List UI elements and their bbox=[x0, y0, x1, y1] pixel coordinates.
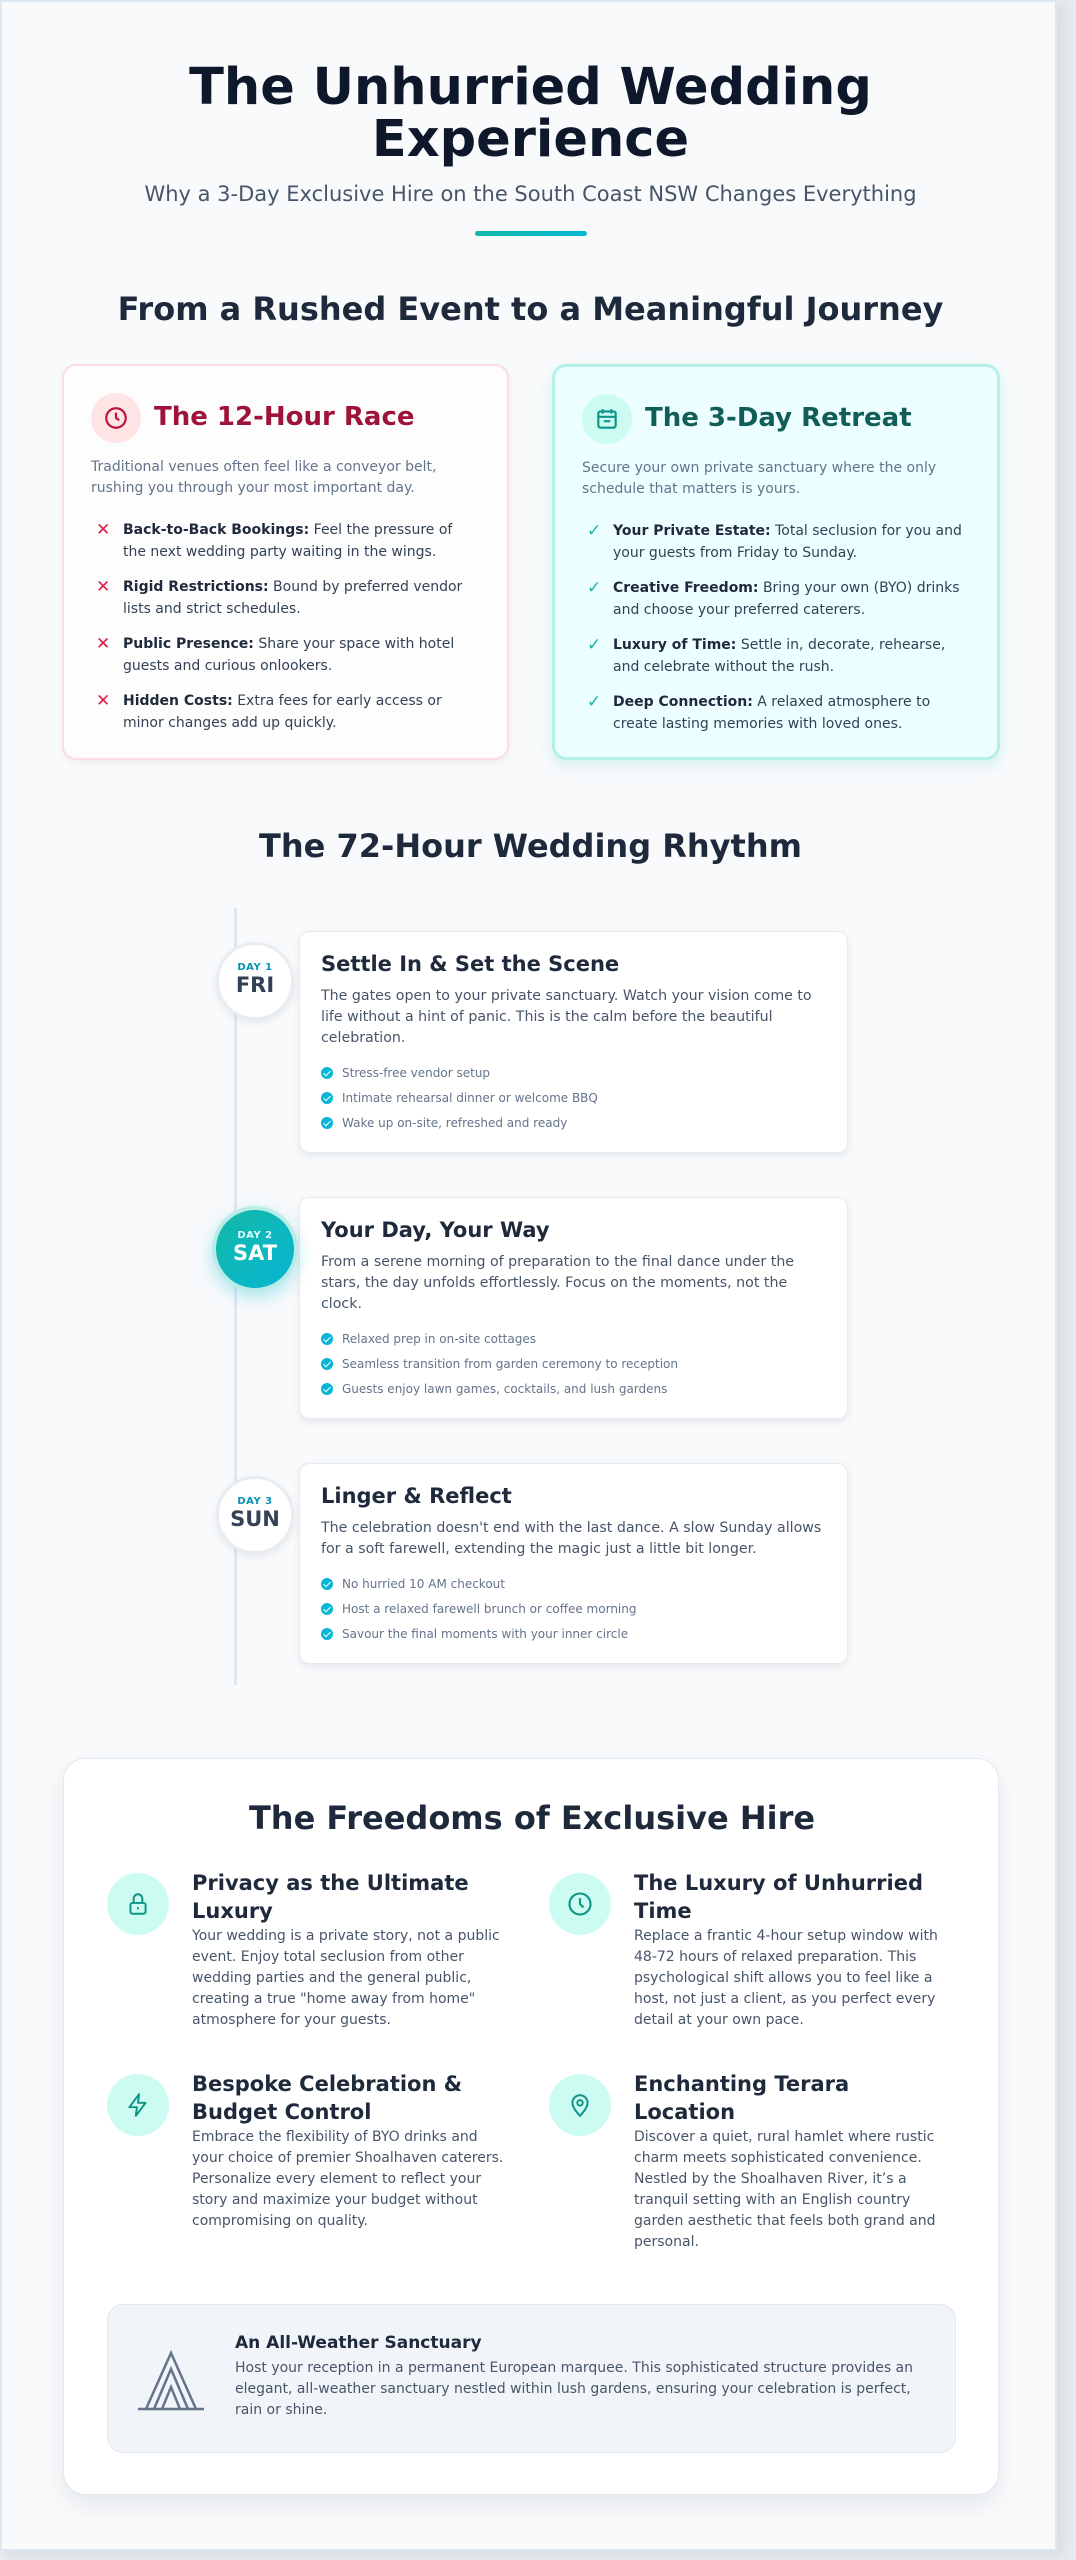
timeline card: day 2: Your Day, Your Way bbox=[321, 1218, 550, 1242]
timeline card: day 1 bbox=[299, 931, 848, 1153]
icon: clock bbox=[91, 393, 141, 443]
timeline card: day 2: Guests enjoy lawn games, cocktails, and lush gardens bbox=[342, 1382, 667, 1396]
list: benefits: ✓ bbox=[587, 635, 601, 655]
feature: privacy: Privacy as the Ultimate Luxury bbox=[192, 1871, 469, 1923]
timeline card: day 2: Seamless transition from garden ceremony to reception bbox=[342, 1357, 678, 1371]
timeline card: day 3 bbox=[299, 1463, 848, 1664]
timeline card: day 1: Stress-free vendor setup bbox=[342, 1066, 490, 1080]
subtitle: Why a 3-Day Exclusive Hire on the South Coast NSW Changes Everything bbox=[144, 182, 917, 206]
timeline line bbox=[234, 908, 237, 1685]
feature: time bbox=[549, 1871, 938, 2028]
timeline card: day 2: From a serene morning of preparation to the final dance under the stars, the day unfolds effortlessly. Focus on the moments, not the clock. bbox=[321, 1254, 794, 1312]
feature: budget: Bespoke Celebration & Budget Control bbox=[192, 2072, 462, 2124]
badge: day 1: DAY 1 bbox=[237, 962, 273, 973]
accent bar bbox=[475, 231, 587, 236]
panel: 3-day retreat bbox=[552, 364, 1000, 760]
timeline card: day 1: Settle In & Set the Scene bbox=[321, 952, 619, 976]
heading: The Freedoms of Exclusive Hire bbox=[249, 1799, 815, 1837]
list: drawbacks: ✕ bbox=[96, 691, 110, 711]
callout: all-weather sanctuary bbox=[107, 2304, 956, 2453]
panel: 12-hour race bbox=[62, 364, 509, 760]
feature: privacy bbox=[107, 1871, 500, 2028]
badge: day 3 bbox=[216, 1476, 294, 1554]
list: benefits: Luxury of Time: Settle in, decorate, rehearse, and celebrate without the rush. bbox=[613, 637, 945, 675]
feature: time: Replace a frantic 4-hour setup window with 48-72 hours of relaxed preparation. This psychological shift allows you to feel like a host, not just a client, as you perfect every detail at your own pace. bbox=[634, 1928, 938, 2028]
badge: day 2 bbox=[212, 1206, 298, 1292]
heading: The 12-Hour Race bbox=[154, 402, 415, 432]
panel: freedoms bbox=[63, 1758, 999, 2495]
list: drawbacks: ✕ bbox=[96, 634, 110, 654]
badge: day 1 bbox=[216, 942, 294, 1020]
list: drawbacks: Public Presence: Share your space with hotel guests and curious onlookers. bbox=[123, 636, 454, 674]
feature: time: The Luxury of Unhurried Time bbox=[634, 1871, 923, 1923]
list: drawbacks: Hidden Costs: Extra fees for early access or minor changes add up quickly. bbox=[123, 693, 442, 731]
badge: day 2: DAY 2 bbox=[237, 1230, 273, 1241]
timeline card: day 2: Relaxed prep in on-site cottages bbox=[342, 1332, 536, 1346]
feature: budget: Embrace the flexibility of BYO drinks and your choice of premier Shoalhaven caterers. Personalize every element to reflect your story and maximize your budget without compromising on quality. bbox=[192, 2129, 503, 2229]
list: benefits: Your Private Estate: Total seclusion for you and your guests from Friday to Sunday. bbox=[613, 523, 962, 561]
timeline card: day 3: No hurried 10 AM checkout bbox=[342, 1577, 505, 1591]
list: benefits: Deep Connection: A relaxed atmosphere to create lasting memories with loved ones. bbox=[613, 694, 930, 732]
timeline card: day 2 bbox=[299, 1197, 848, 1419]
list: benefits bbox=[587, 521, 962, 732]
intro: Secure your own private sanctuary where the only schedule that matters is yours. bbox=[582, 460, 936, 497]
intro: Traditional venues often feel like a conveyor belt, rushing you through your most important day. bbox=[91, 459, 436, 496]
list: drawbacks: ✕ bbox=[96, 577, 110, 597]
title bbox=[189, 58, 872, 169]
feature: location: Enchanting Terara Location bbox=[634, 2072, 849, 2124]
timeline card: day 1: Intimate rehearsal dinner or welcome BBQ bbox=[342, 1091, 598, 1105]
timeline card: day 1: Wake up on-site, refreshed and ready bbox=[342, 1116, 567, 1130]
timeline card: day 3: Linger & Reflect bbox=[321, 1484, 512, 1508]
list: drawbacks: Rigid Restrictions: Bound by preferred vendor lists and strict schedules. bbox=[123, 579, 462, 617]
timeline card: day 3: The celebration doesn't end with the last dance. A slow Sunday allows for a soft farewell, extending the magic just a little bit longer. bbox=[321, 1520, 821, 1557]
heading: rhythm: The 72-Hour Wedding Rhythm bbox=[259, 827, 802, 865]
feature: location bbox=[549, 2072, 936, 2250]
title: The Unhurried Wedding bbox=[189, 58, 872, 117]
timeline card: day 1: The gates open to your private sanctuary. Watch your vision come to life without a hint of panic. This is the calm before the beautiful celebration. bbox=[321, 988, 812, 1046]
icon: calendar bbox=[582, 394, 632, 444]
feature: location: Discover a quiet, rural hamlet where rustic charm meets sophisticated convenience. Nestled by the Shoalhaven River, it’s a tranquil setting with an English country garden aesthetic that feels both grand and personal. bbox=[634, 2129, 936, 2250]
list: benefits: Creative Freedom: Bring your own (BYO) drinks and choose your preferred caterers. bbox=[613, 580, 960, 618]
list: benefits: ✓ bbox=[587, 578, 601, 598]
callout: all-weather sanctuary: An All-Weather Sanctuary bbox=[235, 2333, 482, 2353]
feature: privacy: Your wedding is a private story, not a public event. Enjoy total seclusion from other wedding parties and the general public, creating a true "home away from home" atmosphere for your guests. bbox=[192, 1928, 500, 2028]
feature: budget bbox=[107, 2072, 503, 2229]
list: benefits: ✓ bbox=[587, 692, 601, 712]
timeline card: day 3: Host a relaxed farewell brunch or coffee morning bbox=[342, 1602, 636, 1616]
list: drawbacks: Back-to-Back Bookings: Feel the pressure of the next wedding party waiting in the wings. bbox=[123, 522, 452, 560]
badge: day 3: DAY 3 bbox=[237, 1496, 273, 1507]
badge: day 3: SUN bbox=[230, 1507, 280, 1531]
callout: all-weather sanctuary: Host your reception in a permanent European marquee. This sophisticated structure provides an elegant, all-weather sanctuary nestled within lush gardens, ensuring your celebration is perfect, rain or shine. bbox=[235, 2360, 913, 2418]
heading: The 3-Day Retreat bbox=[645, 403, 912, 433]
icon: marquee tent bbox=[138, 2350, 204, 2410]
badge: day 2: SAT bbox=[233, 1241, 277, 1265]
list: drawbacks bbox=[96, 520, 462, 731]
list: benefits: ✓ bbox=[587, 521, 601, 541]
title: Experience bbox=[372, 110, 689, 169]
timeline card: day 3: Savour the final moments with your inner circle bbox=[342, 1627, 628, 1641]
badge: day 1: FRI bbox=[236, 973, 274, 997]
heading: comparison: From a Rushed Event to a Meaningful Journey bbox=[118, 290, 943, 328]
list: drawbacks: ✕ bbox=[96, 520, 110, 540]
